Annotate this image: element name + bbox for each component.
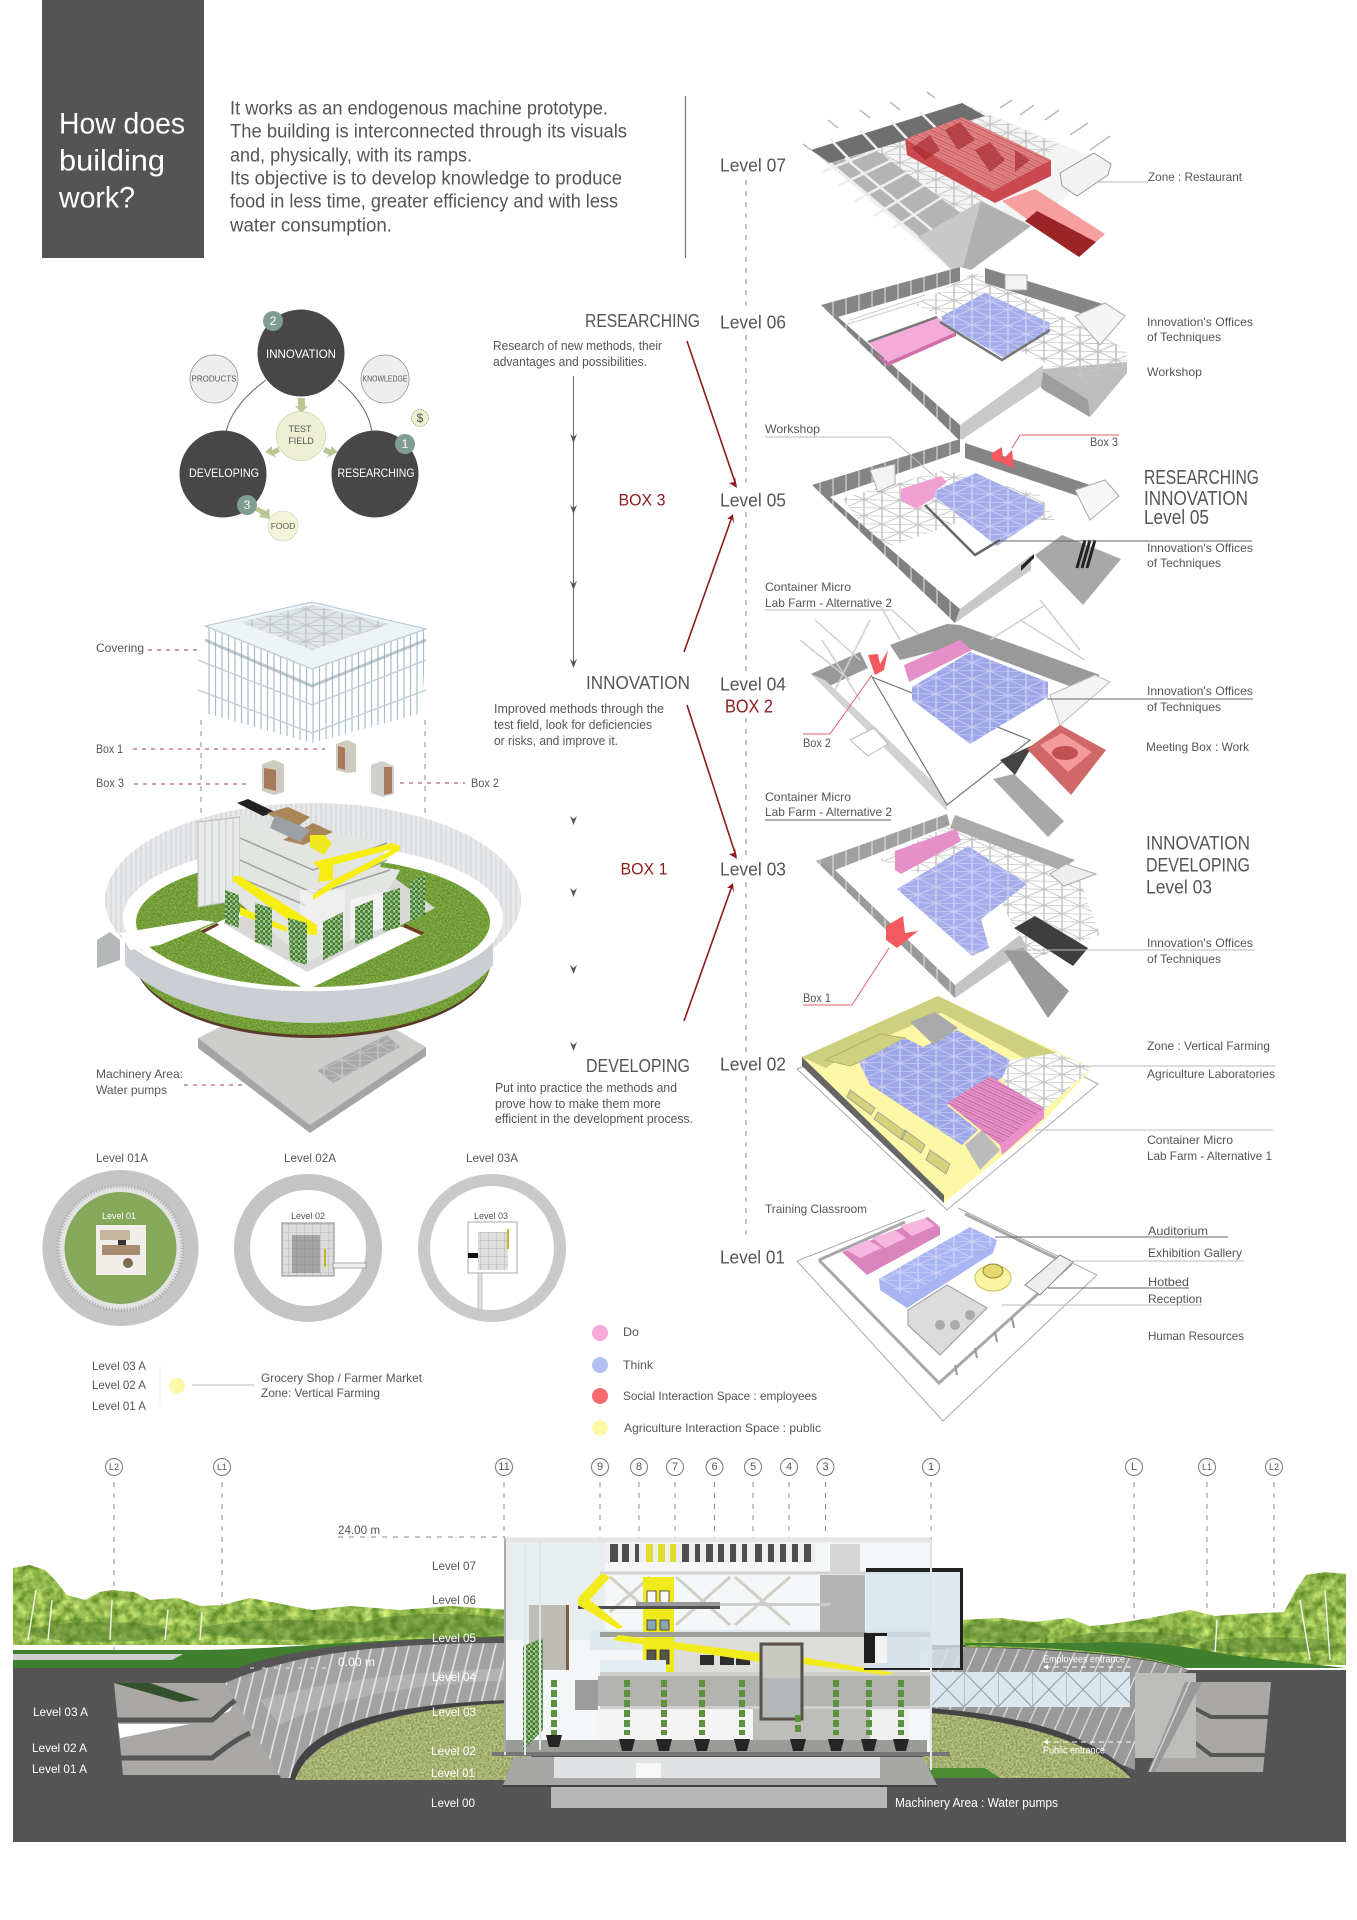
do zone [947,1076,1044,1155]
floor slabs [578,1602,930,1709]
circle: developing: DEVELOPING [189,466,259,480]
section: level labels: Level 03 A [33,1705,88,1719]
heading: researching innovation: Level 05 [1144,507,1209,529]
legend: grocery shop: Level 03 A [92,1359,146,1373]
number badges [237,311,415,515]
box labels [618,490,668,878]
section: trees left [13,1565,520,1668]
level labels: Level 02 [720,1054,786,1074]
heading: innovation: Improved methods through the [494,702,664,716]
yellow ramps [233,843,400,935]
labels: level 04: Innovation's Offices [1147,684,1253,698]
labels: covering and boxes: Water pumps [96,1083,167,1097]
exploded floor: level 03 [816,814,1100,1018]
labels: level 04: Lab Farm - Alternative 2 [765,805,892,819]
section: ground mass [13,1637,1346,1842]
legend: grocery shop: Zone: Vertical Farming [261,1386,380,1400]
labels: covering and boxes: Box 2 [471,776,499,790]
level plan: 01A: Level 01A [96,1151,148,1165]
restaurant ramp [1002,189,1105,257]
labels: level 04: Meeting Box : Work [1146,740,1250,754]
section: left glazed ramp [225,1643,510,1780]
title panel [42,0,204,258]
section: grid markers: L2 [109,1462,119,1472]
labels: level 04: of Techniques [1147,700,1221,714]
heading: innovation: test field, look for deficiencies [494,718,652,732]
right concrete [1135,1673,1196,1758]
section: grid markers: 1 [928,1461,934,1473]
machinery slab [198,980,426,1133]
labels: level 01: Hotbed [1148,1275,1189,1289]
top level windows [605,1544,815,1572]
labels: level 06: of Techniques [1147,330,1221,344]
label: zone restaurant: Zone : Restaurant [1148,170,1243,184]
legend: grocery shop: Level 02 A [92,1378,146,1392]
labels: level 04 [765,675,1253,820]
icon: dollar [412,410,428,426]
labels: level 05: Container Micro [765,580,851,594]
heading: innovation: INNOVATION [586,673,690,693]
circle: researching: RESEARCHING [338,466,414,480]
exploded floor: level 02 [797,996,1098,1210]
green wall [523,1638,543,1750]
level axis [720,154,786,1268]
labels: level 05 [765,422,1259,640]
think zone [942,293,1050,358]
labels: level 02 [765,1039,1275,1216]
legend: colours: Think [623,1358,654,1372]
section: entrance labels: Machinery Area : Water pumps [895,1796,1058,1810]
section: grid markers: 11 [498,1461,510,1473]
machinery room [551,1787,887,1808]
level labels: Level 07 [720,154,786,176]
cross bracing [610,1577,790,1625]
title text: How does [59,108,185,140]
labels: level 03: of Techniques [1147,952,1221,966]
level labels [720,154,786,1268]
soil and lawn [135,882,491,1038]
legend: grocery shop [92,1359,423,1413]
think zone [912,652,1048,744]
heading: developing: DEVELOPING [586,1056,690,1076]
labels: covering and boxes: Box 1 [96,742,123,756]
labels: level 05: Box 3 [1090,435,1118,449]
legend: colours: Do [623,1325,639,1339]
intro text: food in less time, greater efficiency and with less [230,192,618,212]
section: level labels: Level 01 [431,1766,475,1780]
level plan: 02A: Level 02A [284,1151,336,1165]
hotbed [975,1264,1011,1291]
title text: building [59,144,165,178]
front wall [125,940,493,1023]
section: level labels: Level 05 [432,1631,476,1645]
planters [546,1680,909,1751]
intro text: water consumption. [229,216,392,236]
grey ramp [1004,948,1069,1018]
level labels: Level 03 [720,858,786,880]
legend: grocery shop: Level 01 A [92,1399,146,1413]
section: grid markers: L2 [1269,1462,1279,1472]
lawn [136,857,490,987]
level labels: Level 01 [720,1246,785,1268]
level plan: 03A [424,1151,560,1316]
labels: level 06 [1147,315,1253,379]
section: left underground rooms [114,1683,281,1775]
section: grid markers: 3 [822,1461,829,1473]
cycle diagram [180,310,428,541]
legend: colours: Agriculture Interaction Space : public [624,1421,821,1435]
heading: researching innovation: RESEARCHING [1144,467,1259,489]
circle: food: FOOD [271,521,295,531]
icon: dollar: $ [417,411,424,425]
labels: level 02: Lab Farm - Alternative 1 [1147,1149,1272,1163]
heading: developing: Put into practice the methods and [495,1081,677,1095]
labels: level 02: Training Classroom [765,1202,867,1216]
building body [225,815,400,962]
level labels: Level 04 [720,674,786,694]
labels: level 03: Level 03 [1146,878,1212,898]
section: grid markers: 9 [597,1461,603,1473]
circle: innovation: INNOVATION [266,347,336,361]
exploded floor: level 05 [812,439,1121,623]
section: entrance labels: Public entrance [1043,1746,1105,1756]
labels: level 03 [803,834,1255,1005]
section: level labels: Level 02 [431,1744,476,1758]
lobby walls [598,1709,753,1740]
section: dimension labels: 0.00 m [338,1655,375,1669]
section: level labels: Level 07 [432,1559,476,1573]
right glazed bay [864,1568,963,1670]
lower level [503,1757,937,1786]
heading: researching: RESEARCHING [585,311,700,331]
section: grid markers: L [1131,1461,1137,1473]
section: trees right [960,1572,1346,1668]
frame lines [505,1540,931,1770]
box labels: BOX 1 [620,860,668,878]
labels: level 01: Reception [1148,1292,1202,1306]
restaurant zone [905,117,1051,203]
labels: level 05: Innovation's Offices [1147,541,1253,555]
do zone [842,1217,940,1275]
legend: colours [592,1325,821,1436]
section: central building [492,1538,963,1808]
outer wall [105,803,521,997]
section: left inner lawn [295,1703,540,1780]
think zone [879,1227,997,1308]
labels: level 03: Innovation's Offices [1147,936,1253,950]
section: level labels: Level 00 [431,1796,475,1810]
meeting box [1027,725,1106,795]
heading: researching innovation [1144,467,1259,529]
right underground rooms [1150,1682,1271,1772]
heading: innovation [494,673,690,748]
display panel [761,1644,802,1719]
right inner lawn [920,1713,1131,1778]
labels: covering and boxes: Box 3 [96,776,124,790]
heading: researching: Research of new methods, their [493,339,662,353]
labels: level 04: Container Micro [765,790,851,804]
labels: covering and boxes [96,641,499,1097]
yellow core [643,1577,674,1705]
section: grid markers: 4 [786,1461,792,1473]
level plan: 03A: Level 03A [466,1151,518,1165]
tower [198,817,240,907]
think zone [935,473,1044,546]
concrete core [529,1605,566,1670]
labels: level 03: INNOVATION [1146,834,1250,854]
heading: researching: advantages and possibilities. [493,355,647,369]
section: level labels: Level 01 A [32,1762,87,1776]
section: level labels [32,1559,476,1810]
labels: level 03: DEVELOPING [1146,856,1250,876]
section: level labels: Level 04 [432,1670,476,1684]
labels: covering and boxes: Covering [96,641,144,655]
circle: developing [180,430,266,518]
grey rooms [908,1285,987,1355]
legend: grocery shop: Grocery Shop / Farmer Market [261,1371,423,1385]
labels: level 03: Box 1 [803,991,831,1005]
left lawn [13,1636,510,1668]
section: grid markers: 8 [636,1461,642,1473]
test field arrows [254,398,338,519]
section: grid markers [106,1458,1282,1660]
heading: researching innovation: INNOVATION [1144,488,1248,510]
heading: developing: efficient in the development process. [495,1112,693,1126]
plaza [200,895,425,990]
exploded floor: level 01 [797,1208,1097,1421]
section: dimension labels: 24.00 m [338,1523,380,1537]
labels: level 05: Lab Farm - Alternative 2 [765,596,892,610]
heading: researching [493,311,700,369]
level plan: 02A: Level 02 [291,1211,325,1221]
circle: test field: FIELD [288,436,314,446]
white inner band [123,844,503,992]
level plan: 01A: Level 01 [102,1211,136,1221]
level labels: BOX 2 [725,696,773,716]
labels: level 01: Exhibition Gallery [1148,1246,1242,1260]
title text [58,108,185,214]
upper yellow ramp [578,1573,623,1629]
exploded floor: level 07 [803,92,1111,278]
covering structure [198,602,426,743]
do zone [904,640,972,682]
knowledge and products circles: PRODUCTS [192,374,236,384]
ring model [97,799,521,1133]
circle: test field: TEST [288,424,312,434]
circle: test field [276,412,326,460]
do zone [868,317,956,362]
legend: colours: Social Interaction Space : employees [623,1389,817,1403]
exploded floor: level 04 [800,600,1110,837]
labels: level 06: Workshop [1147,365,1202,379]
number badges: 2 [270,314,277,328]
intro text: It works as an endogenous machine prototype. [230,98,608,120]
red arrows [684,341,737,1021]
section: level labels: Level 06 [432,1593,476,1607]
knowledge and products circles: KNOWLEDGE [362,374,408,384]
circle: researching [332,430,418,518]
exploded floor: level 06 [821,267,1127,441]
level plan: 03A: Level 03 [474,1211,508,1221]
labels: covering and boxes: Machinery Area: [96,1067,183,1081]
level plan: 01A [42,1151,198,1326]
do zone [895,829,961,874]
intro text [229,98,627,236]
long yellow ramp [613,1635,895,1675]
circle: food [268,511,298,541]
labels: level 02: Agriculture Laboratories [1147,1067,1275,1081]
section: grid markers: 7 [672,1461,678,1473]
do zone [901,476,947,509]
main floor slab [505,1740,927,1755]
box 3 [992,447,1014,469]
think zone [859,1030,1010,1145]
concrete boxes [262,740,394,797]
level labels: Level 06 [720,312,786,332]
section: level labels: Level 03 [432,1705,476,1719]
intro text: Its objective is to develop knowledge to produce [230,168,622,190]
dark bridge [1014,916,1088,966]
labels: level 06: Innovation's Offices [1147,315,1253,329]
circle: innovation [258,310,344,396]
labels: level 02: Container Micro [1147,1133,1233,1147]
section: entrance labels: Employees entrance [1043,1654,1125,1666]
section: grid markers: L1 [217,1462,227,1472]
intro text: The building is interconnected through its visuals [230,122,627,142]
process timeline [493,311,737,1126]
heading: developing [495,1056,693,1126]
number badges: 3 [244,498,251,512]
intro text: and, physically, with its ramps. [230,146,472,166]
side service core [820,1575,865,1670]
lecture seating [700,1655,750,1665]
knowledge and products circles [190,355,409,403]
labels: level 01 [995,1224,1244,1343]
labels: level 01: Human Resources [1148,1329,1244,1343]
level plan: 02A [242,1151,374,1314]
labels: level 01: Auditorium [1148,1224,1208,1238]
title text: work? [58,182,135,214]
section: grid markers: 5 [750,1461,756,1473]
think zone [897,846,1027,956]
heading: innovation: or risks, and improve it. [494,734,618,748]
number badges: 1 [402,437,409,451]
heading: developing: prove how to make them more [495,1097,661,1111]
section: grid markers: 6 [711,1461,718,1473]
box labels: BOX 3 [618,490,666,510]
section: grid markers: L1 [1202,1462,1212,1472]
green walls [225,875,425,965]
building base [223,867,435,972]
labels: level 05: of Techniques [1147,556,1221,570]
section: level labels: Level 02 A [32,1741,87,1755]
labels: level 05: Workshop [765,422,820,436]
labels: level 04: Box 2 [803,736,831,750]
level labels: Level 05 [720,490,786,510]
labels: level 02: Zone : Vertical Farming [1147,1039,1270,1053]
section: right ramp and lawn [920,1647,1271,1778]
box 1 [886,916,918,948]
section: dimension labels [250,1523,505,1669]
box 2 [868,650,888,675]
section: entrance labels [895,1654,1135,1810]
